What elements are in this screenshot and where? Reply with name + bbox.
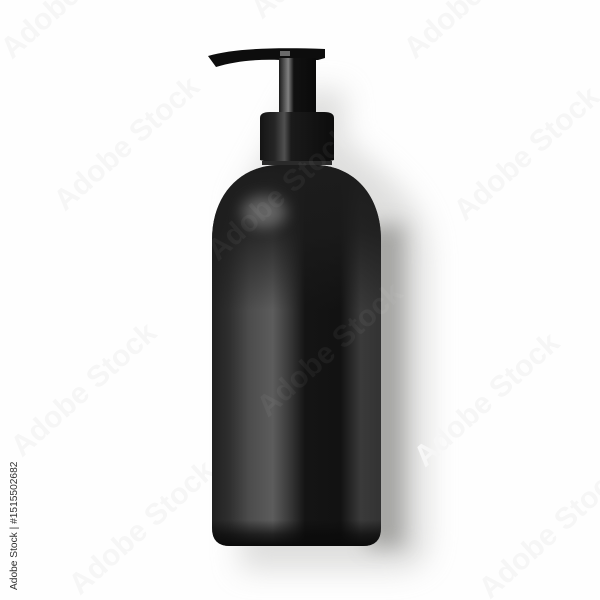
- bottle body: [201, 120, 409, 546]
- pump collar: [260, 112, 334, 165]
- shoulder shading: [212, 165, 381, 310]
- pump stem: [279, 58, 316, 113]
- shoulder highlight: [242, 196, 286, 228]
- watermark on bottle: [201, 120, 409, 423]
- stock id text: Adobe Stock | #1515502682: [9, 461, 20, 590]
- watermark: Adobe Stock: Adobe Stock: [48, 70, 206, 217]
- watermark on bottle: Adobe Stock: [201, 120, 359, 267]
- watermark: Adobe Stock: Adobe Stock: [5, 316, 163, 463]
- watermark: Adobe Stock: Adobe Stock: [408, 326, 566, 473]
- watermark: Adobe Stock: Adobe Stock: [63, 454, 221, 600]
- watermark on bottle: Adobe Stock: [251, 276, 409, 423]
- cast shadow: [240, 90, 428, 570]
- pump nozzle: [208, 48, 325, 67]
- base shading: [212, 520, 381, 546]
